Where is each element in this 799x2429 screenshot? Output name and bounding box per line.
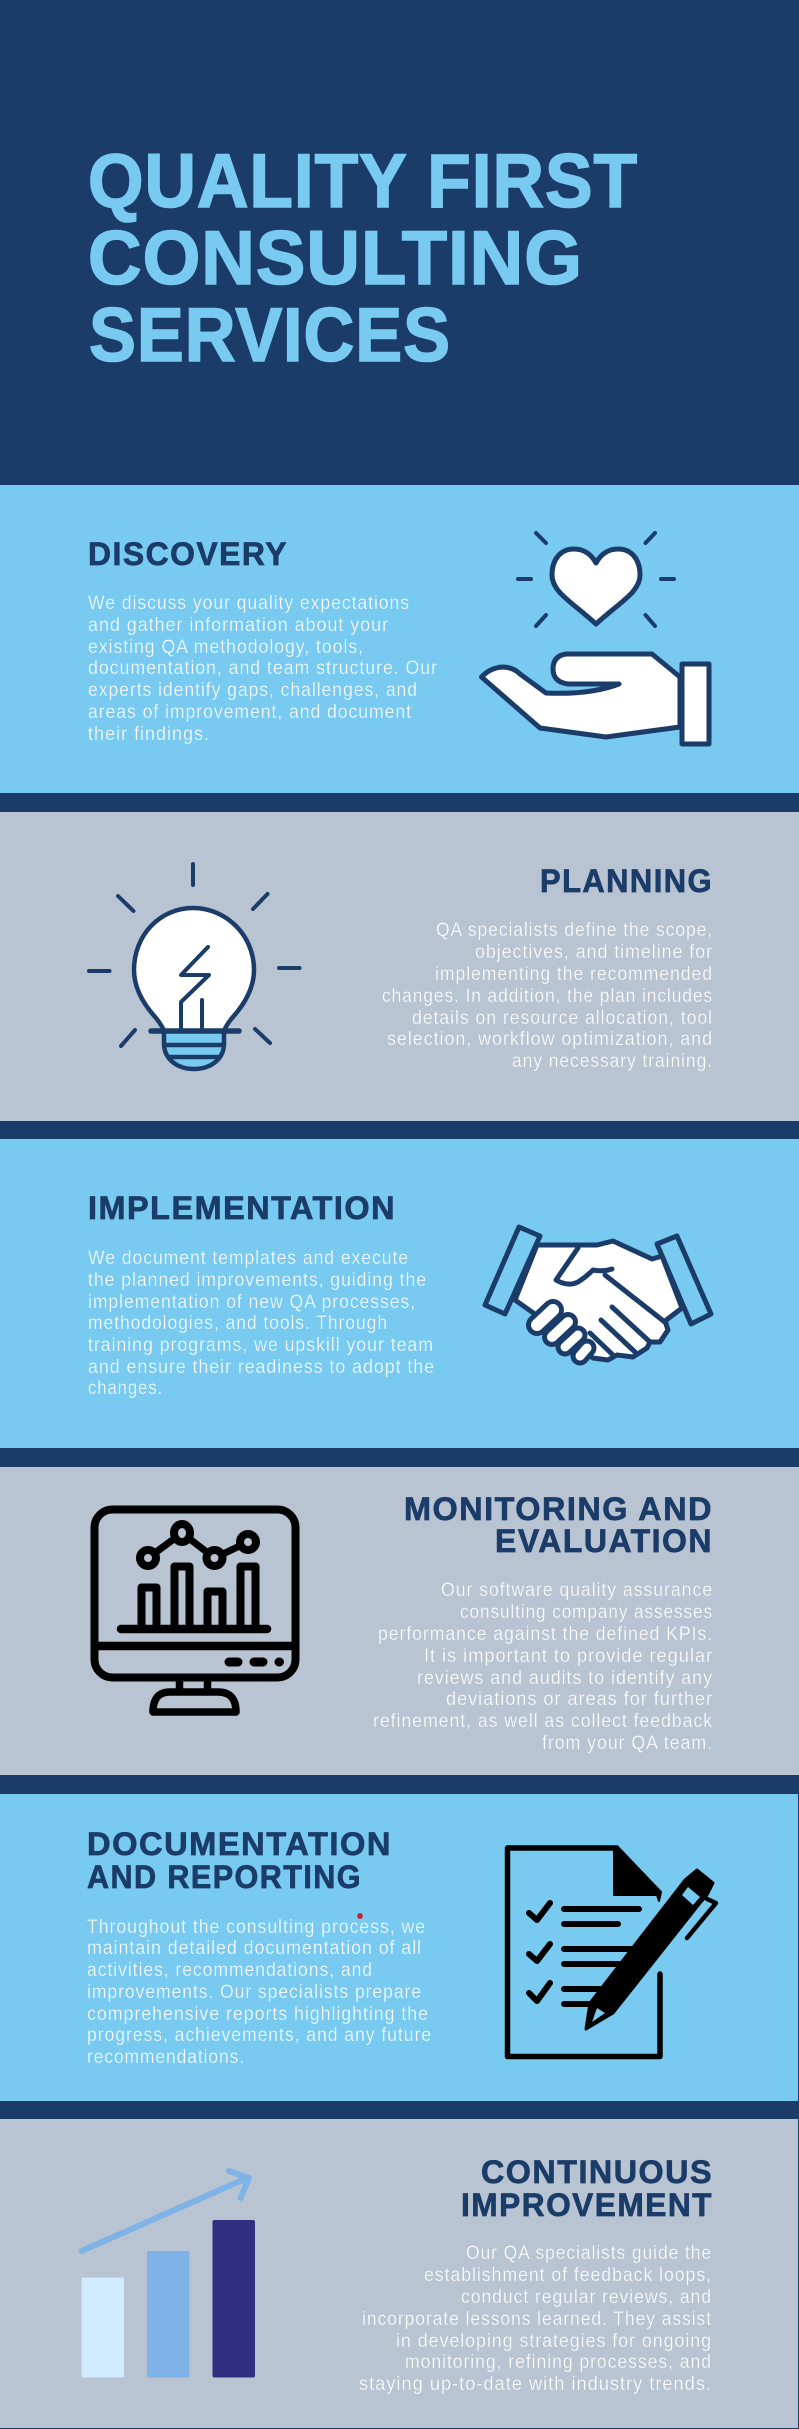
text: discovery: their findings. <box>88 724 210 745</box>
heading: documentation and reporting: DOCUMENTATION <box>87 1826 392 1862</box>
text: implementation: the planned improvements, guiding the <box>88 1270 427 1291</box>
text: continuous improvement: monitoring, refining processes, and <box>405 2352 712 2373</box>
text: continuous improvement: Our QA specialists guide the <box>466 2243 712 2264</box>
text: documentation and reporting: recommendations. <box>87 2047 245 2068</box>
text: documentation and reporting: improvements. Our specialists prepare <box>87 1982 422 2003</box>
heading: planning: PLANNING <box>540 863 713 899</box>
panel: monitoring and evaluation <box>0 1467 799 1775</box>
text: implementation: methodologies, and tools. Through <box>88 1313 388 1334</box>
icon: monitor with chart <box>94 1510 296 1712</box>
panel: documentation and reporting <box>0 1794 798 2101</box>
text: documentation and reporting: maintain detailed documentation of all <box>87 1938 422 1959</box>
text: planning: any necessary training. <box>512 1051 713 1072</box>
heading: implementation: IMPLEMENTATION <box>88 1190 396 1226</box>
text: discovery: experts identify gaps, challenges, and <box>88 680 418 701</box>
icon: bar chart with arrow <box>82 2171 255 2378</box>
text: documentation and reporting: Throughout the consulting process, we <box>87 1917 426 1938</box>
text: discovery: and gather information about your <box>88 615 389 636</box>
text: monitoring and evaluation: It is important to provide regular <box>424 1646 713 1667</box>
text: continuous improvement <box>359 2243 712 2395</box>
text: continuous improvement: incorporate lessons learned. They assist <box>362 2309 712 2330</box>
heading: monitoring and evaluation: MONITORING AND <box>404 1491 713 1527</box>
text: monitoring and evaluation: from your QA team. <box>542 1733 713 1754</box>
text: monitoring and evaluation: performance against the defined KPIs. <box>378 1624 713 1645</box>
heading: monitoring and evaluation <box>404 1491 713 1559</box>
title: QUALITY FIRST <box>88 139 638 224</box>
text: continuous improvement: in developing strategies for ongoing <box>396 2331 712 2352</box>
text: planning: selection, workflow optimization, and <box>387 1029 713 1050</box>
panel: planning <box>0 812 799 1121</box>
panel: continuous improvement <box>0 2119 798 2428</box>
panel: discovery <box>0 485 799 793</box>
icon: document with pen <box>508 1846 716 2056</box>
text: discovery <box>88 593 438 745</box>
text: planning: details on resource allocation, tool <box>412 1008 713 1029</box>
text: documentation and reporting <box>87 1917 432 2068</box>
title: CONSULTING <box>88 216 583 301</box>
text: discovery: existing QA methodology, tools, <box>88 637 364 658</box>
text: planning: QA specialists define the scope, <box>436 920 713 941</box>
title <box>88 139 638 378</box>
text: implementation <box>88 1248 435 1399</box>
text: implementation: changes. <box>88 1378 163 1399</box>
text: monitoring and evaluation: Our software quality assurance <box>441 1580 713 1601</box>
text: documentation and reporting: activities, recommendations, and <box>87 1960 373 1981</box>
text: continuous improvement: conduct regular reviews, and <box>461 2287 712 2308</box>
text: monitoring and evaluation: reviews and audits to identify any <box>417 1668 713 1689</box>
text: discovery: areas of improvement, and document <box>88 702 412 723</box>
heading: continuous improvement: IMPROVEMENT <box>461 2187 713 2223</box>
text: planning: objectives, and timeline for <box>475 942 713 963</box>
text: monitoring and evaluation: refinement, as well as collect feedback <box>373 1711 713 1732</box>
text: planning: implementing the recommended <box>435 964 713 985</box>
red dot <box>357 1913 363 1919</box>
text: documentation and reporting: comprehensive reports highlighting the <box>87 2004 429 2025</box>
title: SERVICES <box>89 293 451 378</box>
text: documentation and reporting: progress, achievements, and any future <box>87 2025 432 2046</box>
text: implementation: We document templates and execute <box>88 1248 409 1269</box>
text: implementation: and ensure their readiness to adopt the <box>88 1357 435 1378</box>
heading: documentation and reporting <box>87 1826 392 1895</box>
icon: handshake <box>485 1227 711 1360</box>
text: continuous improvement: staying up-to-date with industry trends. <box>359 2374 712 2395</box>
text: monitoring and evaluation <box>373 1580 713 1754</box>
text: discovery: We discuss your quality expectations <box>88 593 410 614</box>
panel: implementation <box>0 1139 799 1448</box>
heading: monitoring and evaluation: EVALUATION <box>495 1523 713 1559</box>
heading: documentation and reporting: AND REPORTING <box>87 1859 362 1895</box>
text: implementation: training programs, we upskill your team <box>88 1335 434 1356</box>
text: planning <box>382 920 713 1072</box>
icon: light bulb <box>89 864 300 1069</box>
text: monitoring and evaluation: deviations or areas for further <box>446 1689 713 1710</box>
icon: heart in hand <box>482 533 709 744</box>
text: discovery: documentation, and team structure. Our <box>88 658 438 679</box>
text: implementation: implementation of new QA processes, <box>88 1292 416 1313</box>
text: continuous improvement: establishment of feedback loops, <box>424 2265 712 2286</box>
text: planning: changes. In addition, the plan includes <box>382 986 713 1007</box>
heading: discovery: DISCOVERY <box>88 536 288 572</box>
heading: continuous improvement <box>461 2154 713 2223</box>
heading: continuous improvement: CONTINUOUS <box>481 2154 713 2190</box>
text: monitoring and evaluation: consulting company assesses <box>460 1602 713 1623</box>
